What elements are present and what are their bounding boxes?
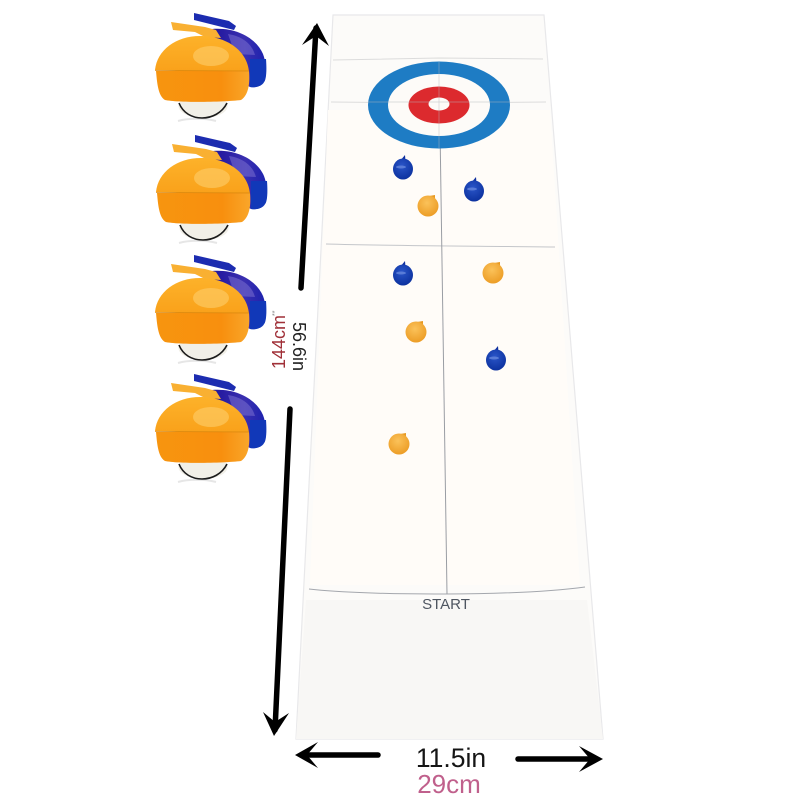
start label: START: [422, 596, 470, 613]
height label inches: 56.6in: [289, 322, 309, 371]
blue stones on mat: [393, 155, 506, 370]
small marks above cm label: **: [272, 310, 279, 316]
arrow: width left: [295, 742, 378, 768]
target rings: [368, 62, 510, 148]
width label inches: 11.5in: [416, 743, 486, 773]
arrow: height up: [301, 23, 329, 288]
curling stone pair 2: [156, 135, 267, 243]
orange stones on mat: [388, 195, 504, 454]
curling stone pair 3: [155, 255, 266, 363]
height label cm: 144cm: [269, 315, 289, 369]
curling stone pair 4: [155, 374, 266, 482]
arrow: height down: [263, 409, 290, 736]
panel: curling mat: [296, 15, 603, 739]
curling stone pair 1: [155, 13, 266, 121]
arrow: width right: [518, 746, 603, 772]
width label cm: 29cm: [417, 769, 481, 799]
court lines: [309, 58, 585, 594]
